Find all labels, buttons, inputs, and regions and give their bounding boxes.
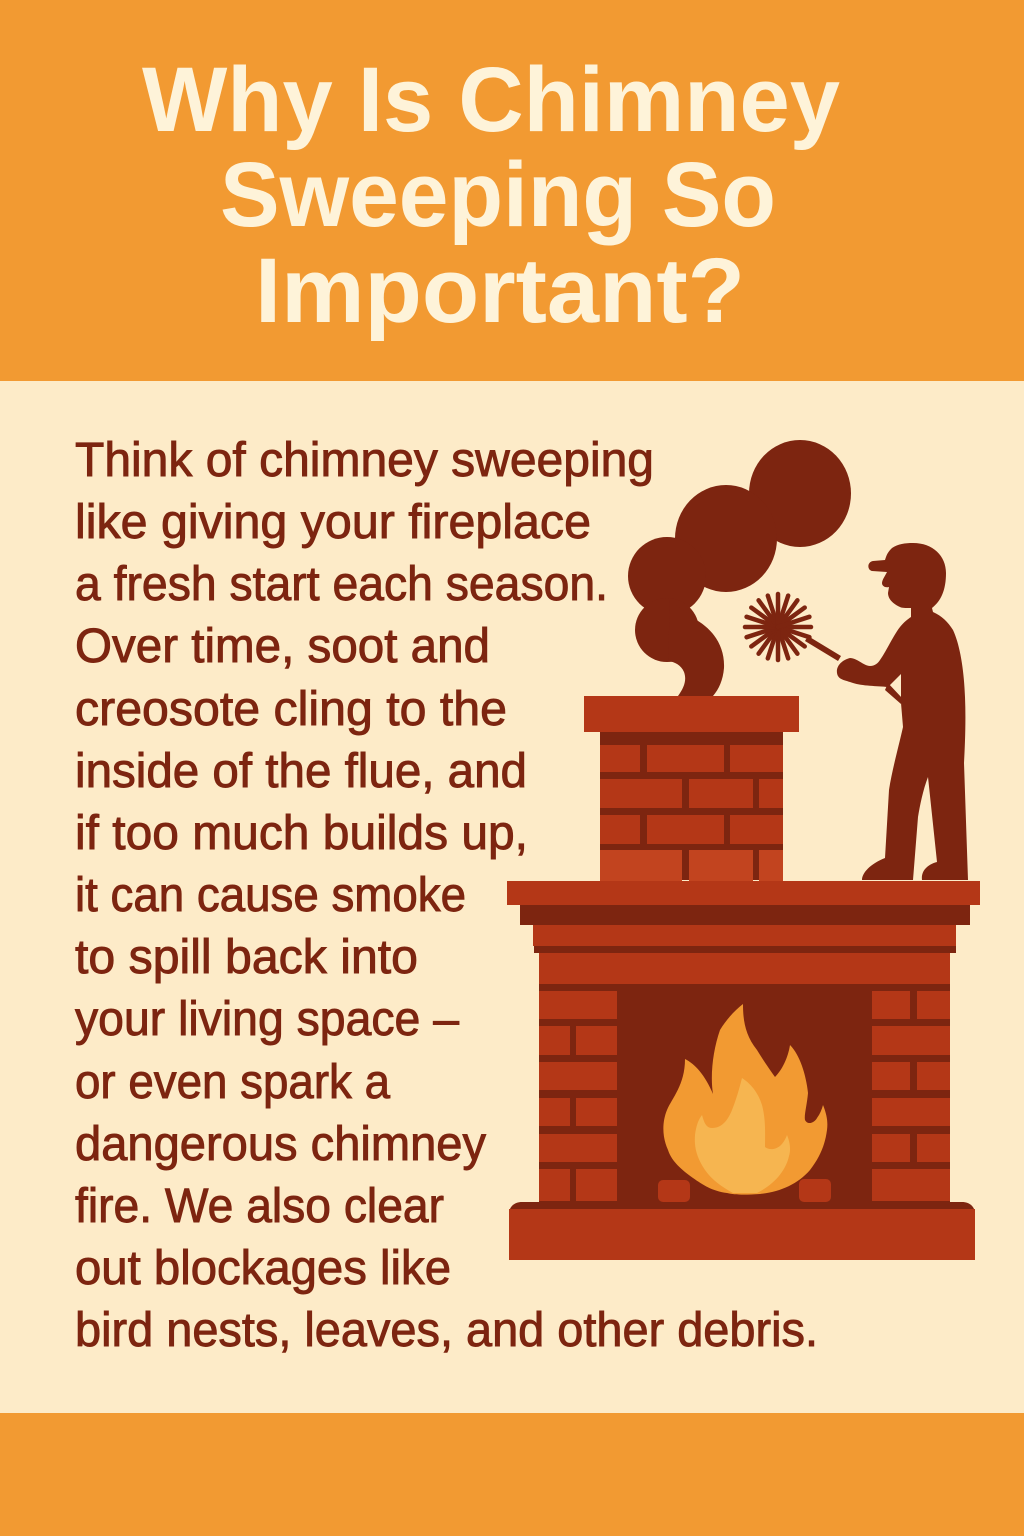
footer band	[0, 1413, 1024, 1536]
body text	[75, 434, 818, 1357]
logs	[658, 1179, 831, 1202]
body text: dangerous chimney	[75, 1118, 486, 1171]
body text: inside of the flue, and	[75, 745, 527, 798]
mantel	[507, 881, 980, 953]
body text: if too much builds up,	[75, 807, 528, 860]
body text: to spill back into	[75, 931, 418, 984]
title	[142, 49, 840, 342]
title: Sweeping So	[220, 144, 776, 246]
icon: smoke	[628, 440, 851, 696]
body text: a fresh start each season.	[75, 558, 608, 611]
body text: fire. We also clear	[75, 1180, 444, 1233]
icon: chimney sweep worker with brush	[745, 543, 968, 880]
body text: your living space –	[75, 993, 459, 1046]
pole	[805, 636, 902, 704]
icon: fireplace	[507, 881, 980, 1260]
title: Why Is Chimney	[142, 49, 840, 151]
body text: out blockages like	[75, 1242, 451, 1295]
brush	[745, 594, 811, 660]
icon: chimney	[584, 696, 799, 881]
flame	[663, 1004, 827, 1195]
right brick column	[872, 991, 950, 1201]
title: Important?	[255, 240, 745, 342]
body text: creosote cling to the	[75, 683, 507, 736]
body text: bird nests, leaves, and other debris.	[75, 1304, 818, 1357]
left brick column	[539, 991, 617, 1201]
header band	[0, 0, 1024, 381]
body text: it can cause smoke	[75, 869, 466, 922]
body text: like giving your fireplace	[75, 496, 591, 549]
hearth	[509, 1202, 975, 1260]
body text: Think of chimney sweeping	[75, 434, 654, 487]
body text: or even spark a	[75, 1056, 390, 1109]
body text: Over time, soot and	[75, 620, 490, 673]
